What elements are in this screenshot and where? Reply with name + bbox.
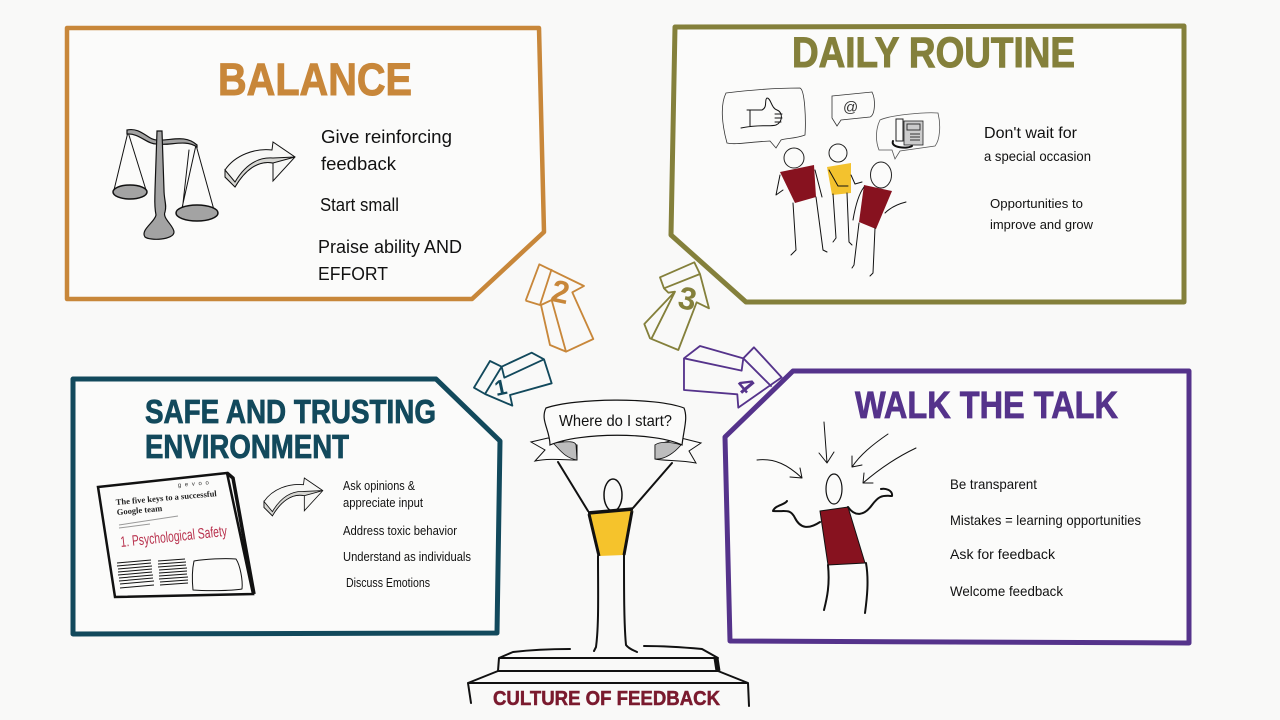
- text block: daily routine tips: Opportunities to: [990, 196, 1083, 211]
- arrow: step 3: 3: [675, 279, 700, 318]
- label: culture of feedback: CULTURE OF FEEDBACK: [493, 688, 721, 710]
- text block: daily routine tips: a special occasion: [984, 148, 1091, 164]
- arrow: balance to tips: [225, 142, 295, 187]
- panel: balance: [67, 28, 544, 299]
- feedback arrows: [757, 422, 916, 483]
- arrow: step 4: 4: [730, 372, 760, 400]
- text block: balance tips: Praise ability AND: [318, 237, 462, 257]
- illustration: article page: 1. Psychological Safety: [120, 523, 228, 551]
- speech bubble: at sign: @: [843, 99, 858, 116]
- heading: balance: BALANCE: [218, 54, 412, 105]
- arrow: step 3: [644, 262, 709, 350]
- illustration: three people talking: [722, 88, 940, 276]
- panel frame: walk the talk: [725, 371, 1189, 643]
- text block: balance tips: Give reinforcing: [321, 127, 452, 147]
- text block: safe environment tips: Ask opinions &: [343, 478, 415, 493]
- text block: safe environment tips: Discuss Emotions: [346, 575, 430, 590]
- arrow: step 1: 1: [492, 374, 509, 401]
- text block: daily routine tips: Don't wait for: [984, 125, 1077, 142]
- text block: balance tips: EFFORT: [318, 264, 388, 284]
- arrow: step 2: [526, 264, 593, 352]
- text block: balance tips: [318, 127, 462, 284]
- text block: daily routine tips: [984, 125, 1094, 232]
- heading: walk the talk: WALK THE TALK: [855, 385, 1118, 427]
- text block: balance tips: Start small: [320, 195, 399, 215]
- panel: safe and trusting environment: [73, 379, 500, 634]
- text block: walk the talk tips: Ask for feedback: [950, 546, 1056, 562]
- text block: daily routine tips: improve and grow: [990, 217, 1094, 232]
- illustration: article page: The five keys to a successful: [115, 488, 218, 507]
- text block: walk the talk tips: Mistakes = learning opportunities: [950, 512, 1141, 528]
- icon: scales: [113, 130, 218, 239]
- banner: where do I start: [531, 400, 701, 463]
- text block: safe environment tips: Address toxic behavior: [343, 523, 458, 538]
- central figure with banner: [468, 400, 749, 710]
- speech bubble: telephone: [876, 113, 940, 159]
- text block: balance tips: feedback: [321, 154, 397, 174]
- speech bubble: at sign: [832, 92, 874, 126]
- person: left: [776, 148, 827, 255]
- figure: person with raised arms: [773, 474, 892, 613]
- arrow: step 4: [684, 346, 782, 408]
- podium: [468, 646, 749, 706]
- heading: safe and trusting environment: SAFE AND TRUSTING: [145, 393, 436, 430]
- arrow: step 1: [474, 353, 552, 406]
- speech bubble: thumbs up: [722, 88, 805, 148]
- text block: walk the talk tips: [950, 476, 1141, 599]
- panel: walk the talk: [725, 371, 1189, 643]
- text block: walk the talk tips: Welcome feedback: [950, 583, 1064, 599]
- text block: safe environment tips: appreciate input: [343, 495, 423, 510]
- arrow: article to tips: [264, 478, 323, 516]
- panel frame: safe and trusting environment: [73, 379, 500, 634]
- illustration: person receiving feedback: [757, 422, 916, 613]
- text block: safe environment tips: [343, 478, 471, 590]
- heading: daily routine: DAILY ROUTINE: [792, 29, 1075, 77]
- arrow: step 2: 2: [548, 272, 573, 311]
- illustration: article page: g e v o o: [178, 480, 210, 489]
- illustration: article page: [98, 473, 254, 597]
- panel frame: daily routine: [671, 26, 1184, 302]
- person: middle: [827, 144, 862, 245]
- illustration: article page: Google team: [116, 503, 163, 517]
- banner: where do I start: Where do I start?: [559, 413, 672, 430]
- panel: daily routine: [671, 26, 1184, 302]
- figure: person on podium: [558, 462, 672, 652]
- heading: safe and trusting environment: [145, 393, 436, 465]
- heading: safe and trusting environment: ENVIRONMENT: [145, 428, 349, 465]
- text block: walk the talk tips: Be transparent: [950, 476, 1037, 492]
- panel frame: balance: [67, 28, 544, 299]
- person: right: [852, 162, 906, 276]
- text block: safe environment tips: Understand as individuals: [343, 549, 471, 564]
